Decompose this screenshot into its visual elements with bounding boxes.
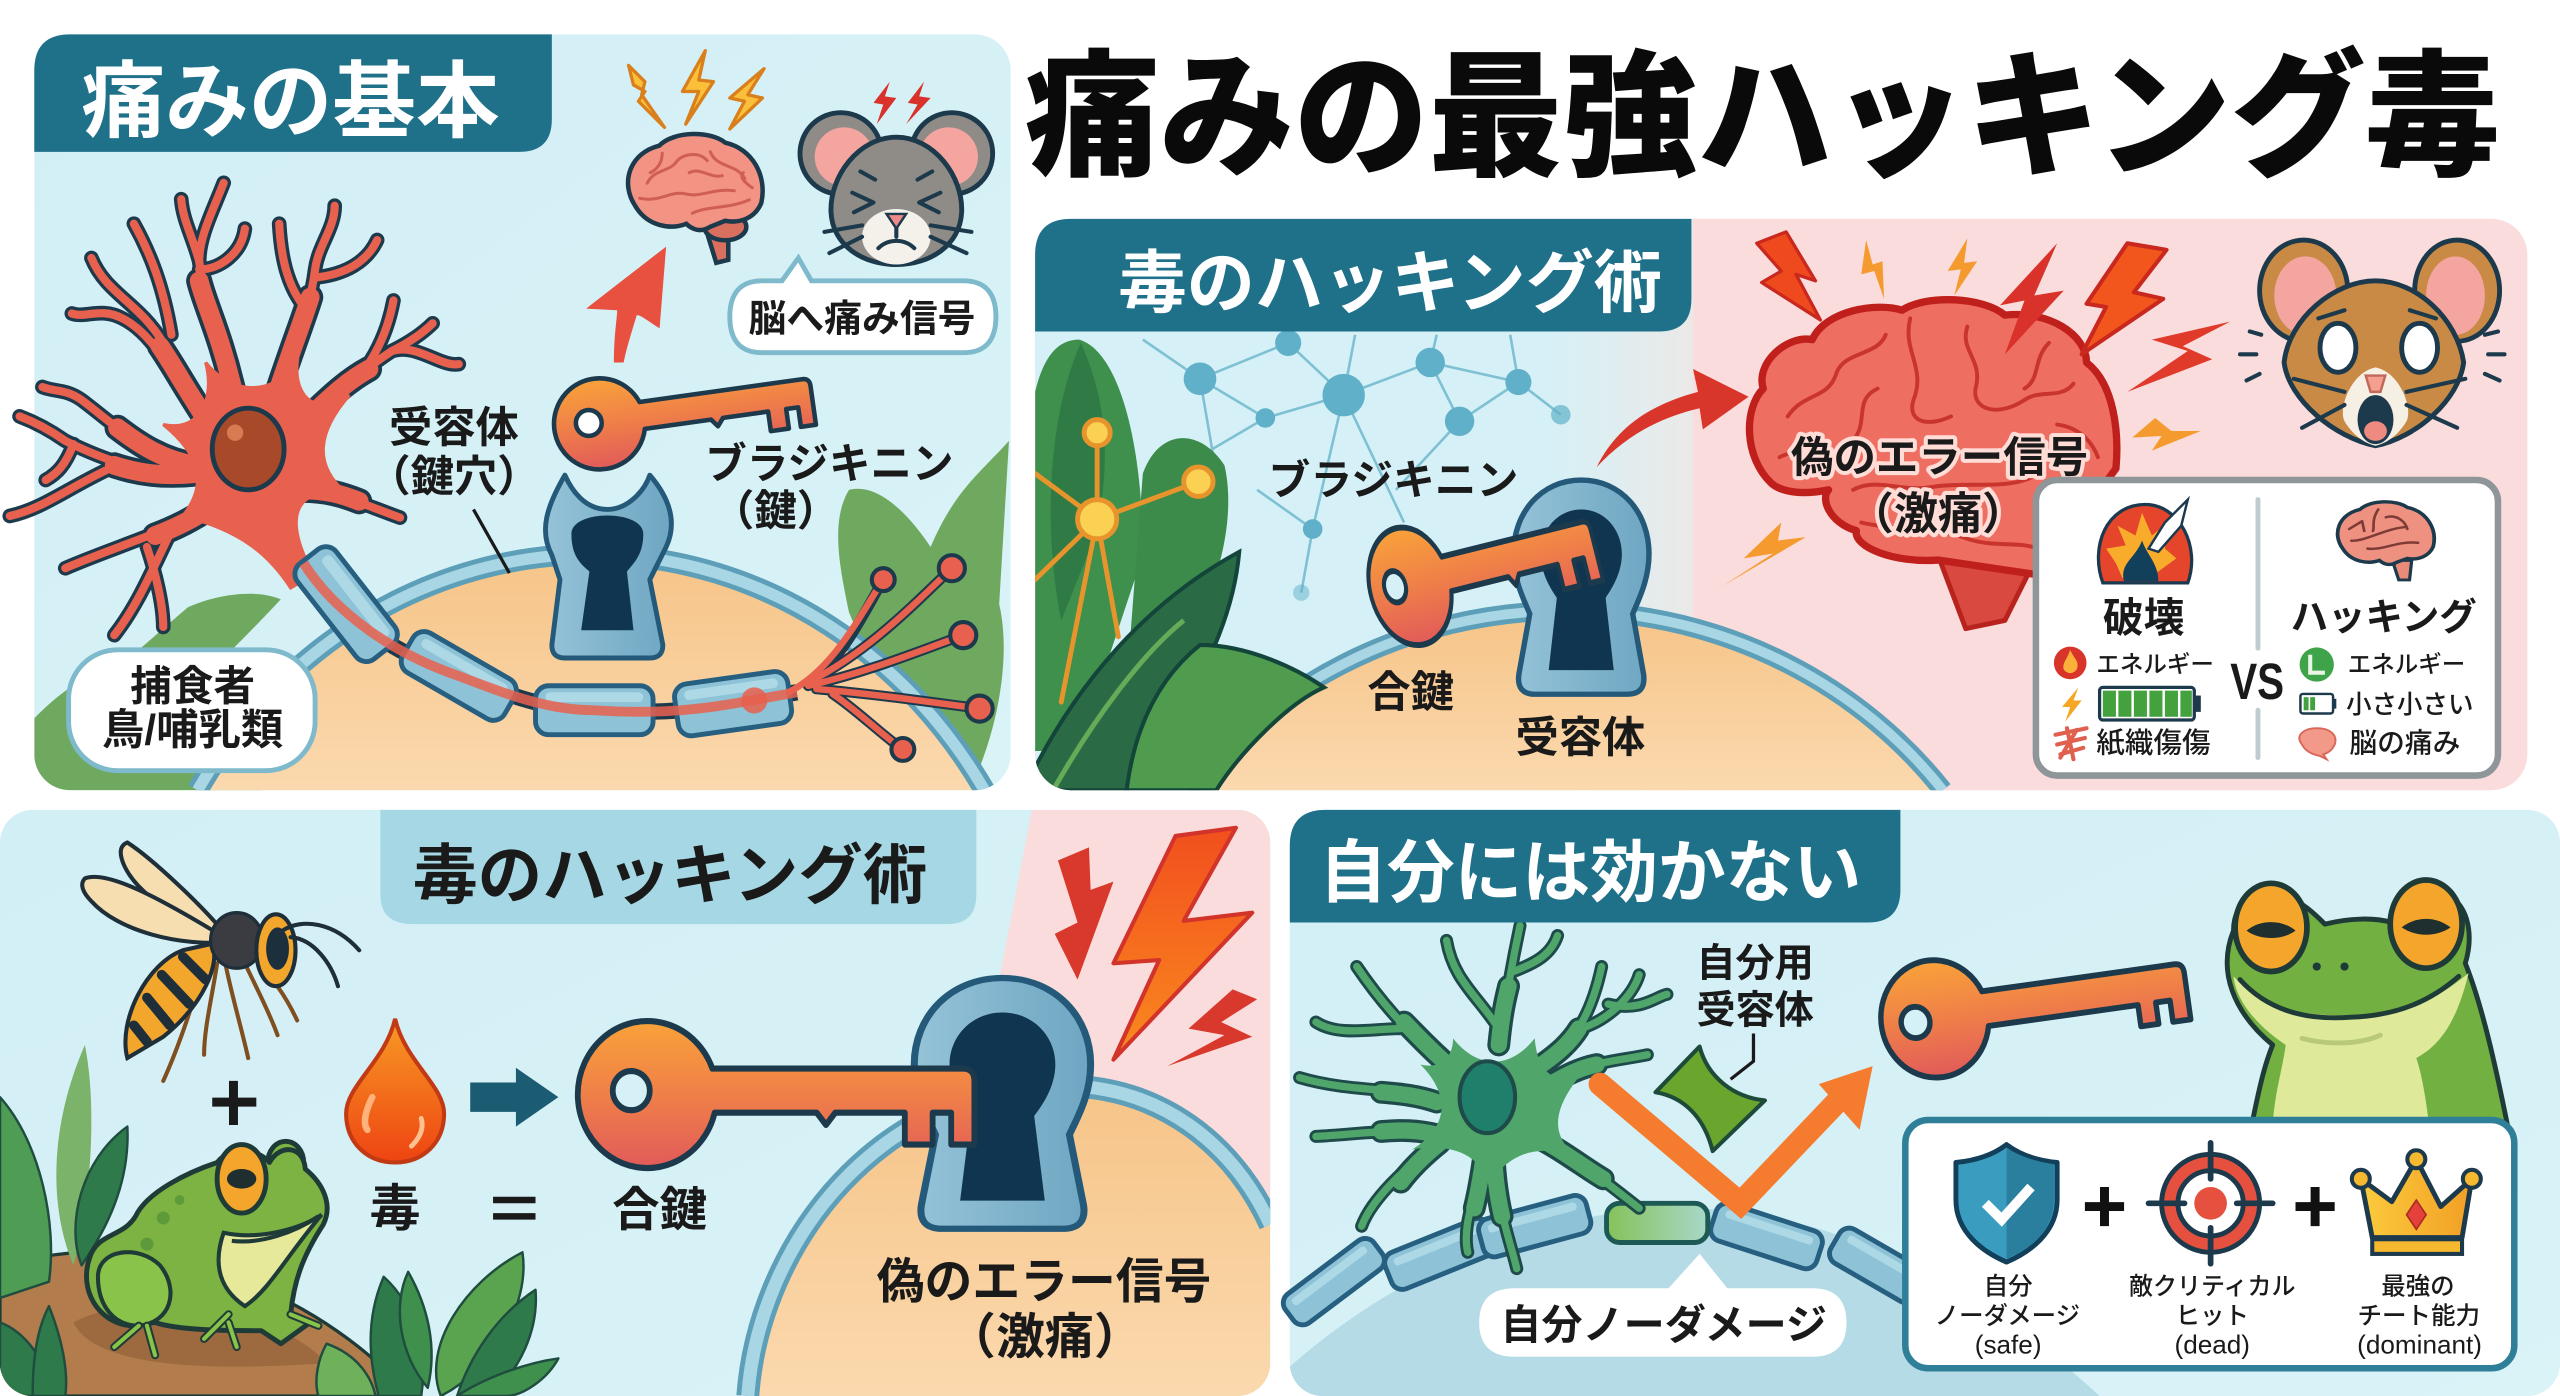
key: fake key in keyhole bbox=[1357, 483, 1608, 654]
list: hacking bbox=[2299, 647, 2473, 759]
header: 毒のハッキング術 bbox=[413, 839, 927, 912]
callout: 自分ノーダメージ: 自分ノーダメージ bbox=[1500, 1302, 1827, 1348]
icon: crown bbox=[2352, 1150, 2481, 1254]
panel: destruction vs hacking bbox=[2036, 480, 2498, 776]
label: 自分用 受容体 bbox=[1696, 942, 1814, 1079]
list: hacking: 小さ小さい bbox=[2346, 690, 2473, 720]
callout: 捕食者: 鳥/哺乳類 bbox=[102, 707, 283, 754]
header: 毒のハッキング術 bbox=[1118, 245, 1662, 322]
neuron: red bbox=[10, 183, 459, 635]
foliage: lower left bbox=[34, 594, 281, 790]
header bbox=[1035, 219, 1691, 331]
label: ブラジキニン 鍵: ブラジキニン bbox=[705, 440, 953, 487]
icon: shield bbox=[1956, 1145, 2057, 1262]
label: 破壊: 破壊 bbox=[2103, 595, 2185, 641]
arrow to brain bbox=[1597, 369, 1749, 467]
cell body bbox=[1218, 622, 1930, 790]
panel: 痛みの基本 bbox=[10, 34, 1011, 790]
list: hacking: 脳の痛み bbox=[2349, 728, 2460, 759]
callout: 捕食者: 捕食者 bbox=[130, 662, 255, 709]
label: 合鍵: 合鍵 bbox=[1367, 669, 1454, 717]
label: equals bbox=[493, 1200, 536, 1216]
header: 痛みの基本 bbox=[82, 56, 500, 149]
list: destruction bbox=[2054, 647, 2214, 760]
label: 自分 safe bbox=[1935, 1273, 2080, 1360]
label: 偽のエラー信号 bbox=[877, 1255, 1211, 1365]
cell membrane bbox=[1189, 611, 1943, 790]
icon: smiling frog bbox=[2227, 880, 2508, 1127]
icon: panicked mouse bbox=[2240, 240, 2504, 446]
label: 自分 safe: ノーダメージ bbox=[1935, 1302, 2080, 1330]
plus bbox=[2296, 1187, 2335, 1226]
label: 自分用 受容体: 自分用 bbox=[1696, 942, 1814, 985]
cell interior bbox=[1290, 1208, 2100, 1396]
arrow to brain bbox=[586, 247, 666, 362]
header bbox=[34, 34, 552, 152]
panel: 毒のハッキング術 (下) bbox=[0, 810, 1270, 1396]
label: 敵クリティカル dead: ヒット bbox=[2176, 1303, 2249, 1330]
callout: 捕食者 bbox=[69, 650, 315, 771]
panel: three abilities bbox=[1905, 1120, 2514, 1368]
keyhole: receptor bbox=[545, 475, 671, 658]
label: 敵クリティカル dead bbox=[2129, 1273, 2296, 1360]
grass: right bbox=[316, 1252, 558, 1396]
left background bbox=[1035, 219, 1693, 790]
callout: 脳へ痛み信号: 脳へ痛み信号 bbox=[749, 297, 976, 339]
arrow bbox=[470, 1068, 558, 1127]
label: 最強の dominant: 最強の bbox=[2381, 1273, 2455, 1301]
panel: 自分には効かない bbox=[1279, 810, 2560, 1396]
receptor shape bbox=[1656, 1047, 1765, 1151]
pink danger corner bbox=[999, 810, 1270, 1200]
mound bbox=[0, 1251, 408, 1396]
label: 敵クリティカル dead: 敵クリティカル bbox=[2129, 1273, 2296, 1301]
label: VS: VS bbox=[2230, 653, 2284, 710]
label: 最強の dominant bbox=[2357, 1273, 2482, 1360]
label: ブラジキニン 鍵: （鍵） bbox=[712, 488, 839, 535]
icon: wasp bbox=[82, 842, 359, 1081]
cell body bbox=[198, 554, 984, 790]
grass: left bbox=[0, 1045, 128, 1396]
label: ブラジキニン: ブラジキニン bbox=[1269, 457, 1518, 504]
label: 偽のエラー信号: 偽のエラー信号 bbox=[877, 1255, 1211, 1309]
plus bbox=[212, 1081, 256, 1125]
icon: venom drop bbox=[346, 1019, 444, 1162]
list: hacking: エネルギー bbox=[2348, 653, 2465, 679]
keyhole: receptor bbox=[914, 978, 1091, 1229]
panel: 毒のハッキング術 (上) bbox=[1035, 219, 2527, 790]
brain: large red bbox=[1749, 300, 2117, 629]
cell membrane bbox=[198, 554, 984, 790]
icon: small brain bbox=[2338, 502, 2434, 580]
plant bbox=[1035, 340, 1324, 790]
label: 毒: 毒 bbox=[370, 1180, 420, 1237]
foliage: right bbox=[838, 441, 1009, 767]
cell body bbox=[748, 1086, 1270, 1396]
keyhole: receptor bbox=[1513, 480, 1649, 694]
icon: brain bbox=[628, 134, 763, 263]
arrow: deflected bbox=[1600, 1066, 1873, 1203]
neuron: green bbox=[1300, 926, 1667, 1269]
label: 合鍵: 合鍵 bbox=[612, 1184, 707, 1237]
key: bradykinin bbox=[548, 349, 818, 475]
cell membrane bbox=[748, 1086, 1270, 1396]
label: 受容体: 受容体 bbox=[1516, 715, 1645, 763]
membrane segments bbox=[1279, 1193, 1930, 1329]
callout: 脳へ痛み信号 bbox=[730, 258, 996, 353]
icon: gauge bbox=[2098, 500, 2192, 583]
lightning: yellow trio bbox=[629, 51, 764, 129]
label: ブラジキニン 鍵 bbox=[705, 440, 953, 535]
plus bbox=[2085, 1187, 2124, 1226]
label: 偽のエラー信号: （激痛） bbox=[1850, 490, 2026, 539]
label: 敵クリティカル dead: (dead) bbox=[2175, 1330, 2250, 1360]
label: 受容体 鍵穴: （鍵穴） bbox=[367, 453, 540, 501]
label: 最強の dominant: チート能力 bbox=[2358, 1302, 2480, 1330]
key: fake key bbox=[578, 1021, 974, 1168]
callout: 自分ノーダメージ bbox=[1479, 1254, 1847, 1357]
axon terminals bbox=[789, 555, 993, 761]
label: 自分用 受容体: 受容体 bbox=[1696, 990, 1814, 1033]
label: 最強の dominant: (dominant) bbox=[2357, 1330, 2482, 1360]
header bbox=[380, 810, 976, 924]
molecule network bbox=[1143, 330, 1571, 601]
label: 偽のエラー信号 bbox=[1791, 434, 2088, 539]
list: destruction: 紙織傷傷 bbox=[2096, 728, 2211, 760]
axon with myelin bbox=[290, 541, 797, 738]
lightning: around brain bbox=[1722, 232, 2230, 586]
label: 偽のエラー信号: 偽のエラー信号 bbox=[1791, 434, 2088, 481]
key: toxin key bbox=[1873, 925, 2194, 1085]
list: destruction: エネルギー bbox=[2096, 653, 2214, 679]
header bbox=[1290, 810, 1900, 922]
label: 自分 safe: 自分 bbox=[1984, 1273, 2033, 1301]
label: 受容体 鍵穴 bbox=[367, 404, 540, 573]
icon: target bbox=[2149, 1143, 2273, 1264]
title: 痛みの最強ハッキング毒 bbox=[1025, 42, 2500, 195]
label: 自分 safe: (safe) bbox=[1975, 1330, 2042, 1360]
label: 偽のエラー信号: （激痛） bbox=[947, 1311, 1143, 1365]
icon: mouse in pain bbox=[800, 82, 993, 265]
lightning: big bbox=[1055, 828, 1257, 1066]
icon: frog on mound bbox=[87, 1141, 327, 1355]
header: 自分には効かない bbox=[1319, 834, 1861, 911]
label: 受容体 鍵穴: 受容体 bbox=[389, 404, 519, 452]
label: ハッキング: ハッキング bbox=[2291, 596, 2477, 638]
